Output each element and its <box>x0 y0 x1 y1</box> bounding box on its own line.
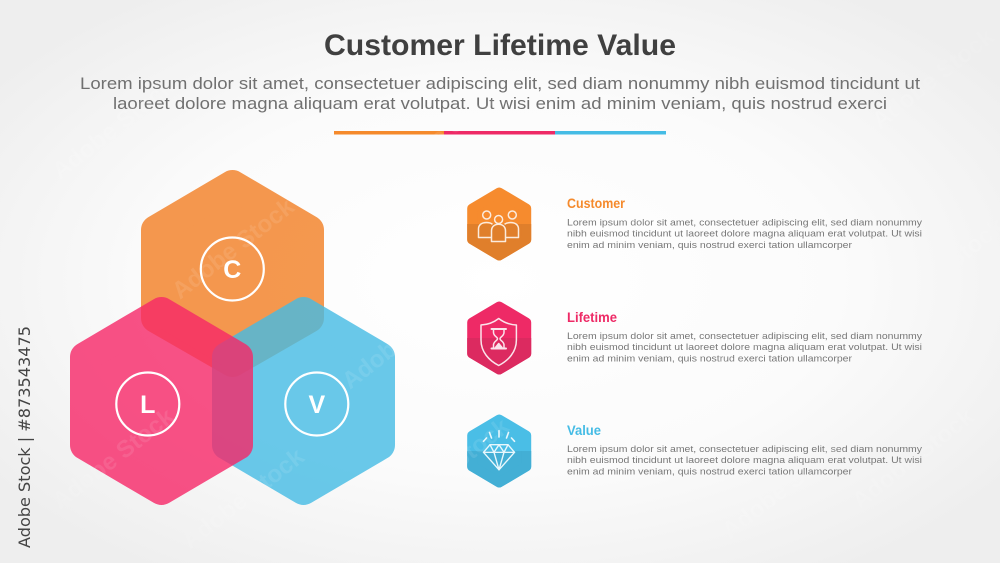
watermark pattern: Adobe Stock <box>47 73 180 185</box>
body text: Customer: nibh euismod tincidunt ut laoreet dolore magna aliquam erat volutpat. Ut wisi <box>567 229 922 240</box>
watermark pattern: Adobe Stock <box>707 88 840 200</box>
heading: Value: Value <box>567 423 601 438</box>
body text: Customer: Lorem ipsum dolor sit amet, consectetuer adipiscing elit, sed diam nonummy <box>567 218 922 228</box>
hexagon C <box>156 185 309 362</box>
body text: Customer <box>567 218 922 251</box>
circle letter C: C <box>223 256 241 284</box>
body text: Customer: enim ad minim veniam, quis nostrud exerci tation ullamcorper <box>567 240 852 251</box>
watermark pattern: Adobe Stock <box>537 193 670 305</box>
watermark pattern: Adobe Stock <box>337 283 470 395</box>
subtitle text: laoreet dolore magna aliquam erat volutpat. Ut wisi enim ad minim veniam, quis nostrud exerci <box>113 94 887 113</box>
subtitle text <box>80 74 920 113</box>
icon: value hexagon <box>472 420 526 482</box>
watermark pattern: Adobe Stock <box>717 433 850 545</box>
item: Customer <box>472 192 922 256</box>
side stock id text: Adobe Stock | #873543475 <box>15 326 34 548</box>
watermark pattern: Adobe Stock <box>47 403 180 515</box>
watermark pattern: Adobe Stock <box>847 403 980 515</box>
tricolor divider <box>334 131 666 134</box>
watermark pattern: Adobe Stock <box>867 23 1000 135</box>
body text: Value <box>567 444 922 477</box>
icon: customer hexagon <box>472 192 526 256</box>
circle letter V <box>285 372 348 436</box>
body text: Value: Lorem ipsum dolor sit amet, consectetuer adipiscing elit, sed diam nonummy <box>567 444 922 455</box>
item: Value <box>472 420 922 482</box>
hexagon venn diagram <box>85 185 380 490</box>
item: Lifetime <box>472 306 922 370</box>
body text: Lifetime: nibh euismod tincidunt ut laoreet dolore magna aliquam erat volutpat. Ut wisi <box>567 342 922 353</box>
circle letter C <box>201 238 264 300</box>
heading: Lifetime: Lifetime <box>567 310 617 325</box>
circle letter L: L <box>140 391 155 419</box>
body text: Lifetime <box>567 331 922 364</box>
body text: Lifetime: enim ad minim veniam, quis nostrud exerci tation ullamcorper <box>567 353 852 364</box>
watermark pattern: Adobe Stock <box>377 78 510 190</box>
subtitle text: Lorem ipsum dolor sit amet, consectetuer adipiscing elit, sed diam nonummy nibh euismod tincidunt ut <box>80 74 920 93</box>
circle letter L <box>116 372 179 436</box>
heading: Customer: Customer <box>567 196 626 211</box>
title: Customer Lifetime Value <box>324 29 676 62</box>
hexagon V <box>227 312 380 490</box>
hexagon L <box>85 312 238 490</box>
icon: lifetime hexagon <box>472 306 526 370</box>
body text: Value: nibh euismod tincidunt ut laoreet dolore magna aliquam erat volutpat. Ut wisi <box>567 455 922 466</box>
circle letter V: V <box>308 391 325 419</box>
body text: Lifetime: Lorem ipsum dolor sit amet, consectetuer adipiscing elit, sed diam nonummy <box>567 331 922 342</box>
watermark pattern: Adobe Stock <box>382 413 515 525</box>
watermark pattern: Adobe Stock <box>177 443 310 555</box>
watermark pattern: Adobe Stock <box>167 193 300 305</box>
watermark pattern: Adobe Stock <box>677 293 810 405</box>
body text: Value: enim ad minim veniam, quis nostrud exerci tation ullamcorper <box>567 466 852 477</box>
